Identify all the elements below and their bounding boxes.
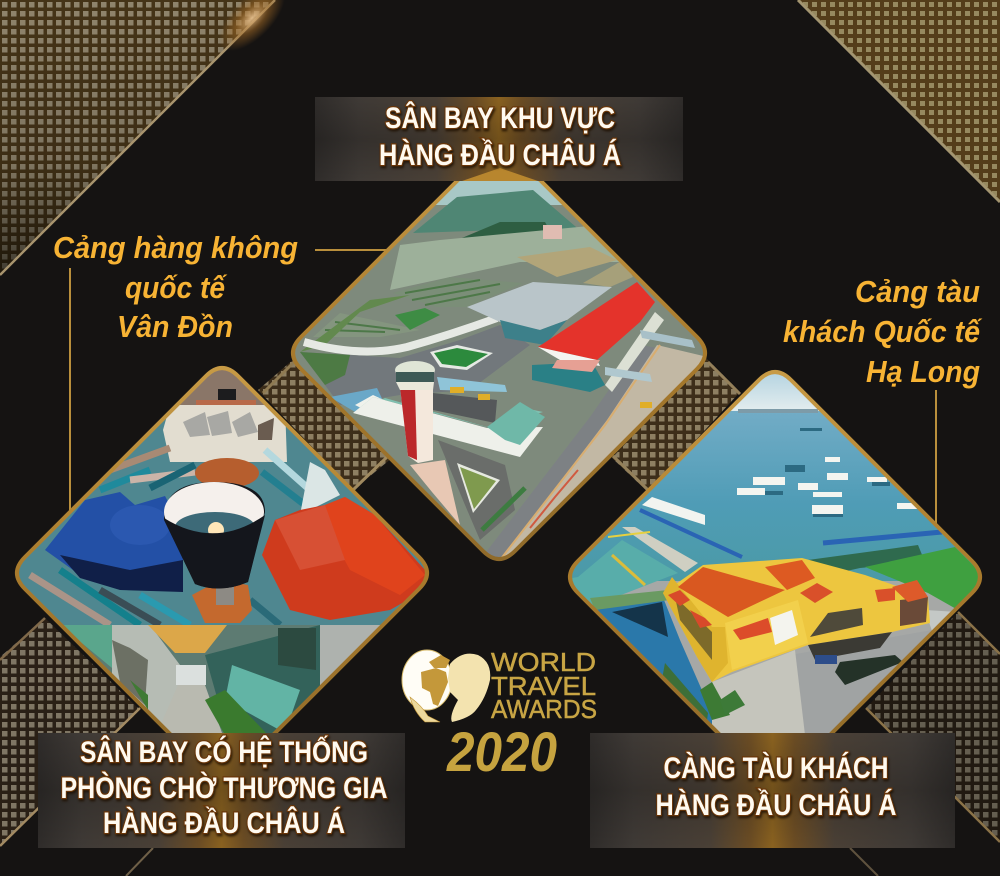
banner: regional airport award: HÀNG ĐẦU CHÂU Á [379, 138, 621, 172]
banner: cruise port award [590, 733, 955, 848]
banner: cruise port award: HÀNG ĐẦU CHÂU Á [656, 788, 896, 822]
logo: World Travel Awards 2020: 2020 [446, 720, 557, 783]
photo: Ha Long port diamond [568, 370, 982, 733]
leader line: Ha Long to right photo [935, 390, 937, 530]
pattern wedge: bottom right [850, 612, 1000, 876]
banner: regional airport award [315, 97, 683, 181]
pattern wedge: top left [0, 0, 296, 275]
pattern wedge: centre left [258, 358, 392, 490]
label: Ha Long port: Cảng tàu [855, 274, 980, 309]
logo: World Travel Awards 2020: TRAVEL [491, 671, 596, 701]
photo: business lounge diamond [14, 366, 430, 733]
leader line: Van Don to left photo [69, 268, 71, 516]
label: Van Don airport: Vân Đồn [117, 309, 233, 344]
banner: business lounge award: PHÒNG CHỜ THƯƠNG GIA [60, 771, 388, 805]
pattern wedge: bottom left [0, 618, 153, 876]
banner: cruise port award: CÀNG TÀU KHÁCH [664, 751, 888, 785]
label: Ha Long port: khách Quốc tế [783, 314, 983, 349]
photo: Van Don airport diamond [290, 181, 708, 562]
logo: World Travel Awards 2020: AWARDS [491, 694, 597, 724]
icon: globe and kissing head [402, 650, 490, 722]
banner: regional airport award: SÂN BAY KHU VỰC [385, 101, 615, 135]
label: Van Don airport: quốc tế [125, 270, 227, 305]
logo: World Travel Awards 2020 [402, 647, 597, 783]
logo: World Travel Awards 2020: WORLD [491, 647, 596, 677]
label: Van Don airport: Cảng hàng không [53, 230, 298, 265]
banner: business lounge award [38, 733, 405, 848]
banner: business lounge award: HÀNG ĐẦU CHÂU Á [103, 806, 345, 840]
label: Ha Long port: Hạ Long [866, 354, 980, 389]
leader line: Van Don to airport photo [315, 249, 395, 251]
banner: business lounge award: SÂN BAY CÓ HỆ THỐNG [80, 735, 368, 769]
pattern wedge: centre right [612, 358, 740, 492]
label: Ha Long port [783, 274, 983, 389]
label: Van Don airport [53, 230, 298, 344]
pattern wedge: top right [798, 0, 1000, 202]
